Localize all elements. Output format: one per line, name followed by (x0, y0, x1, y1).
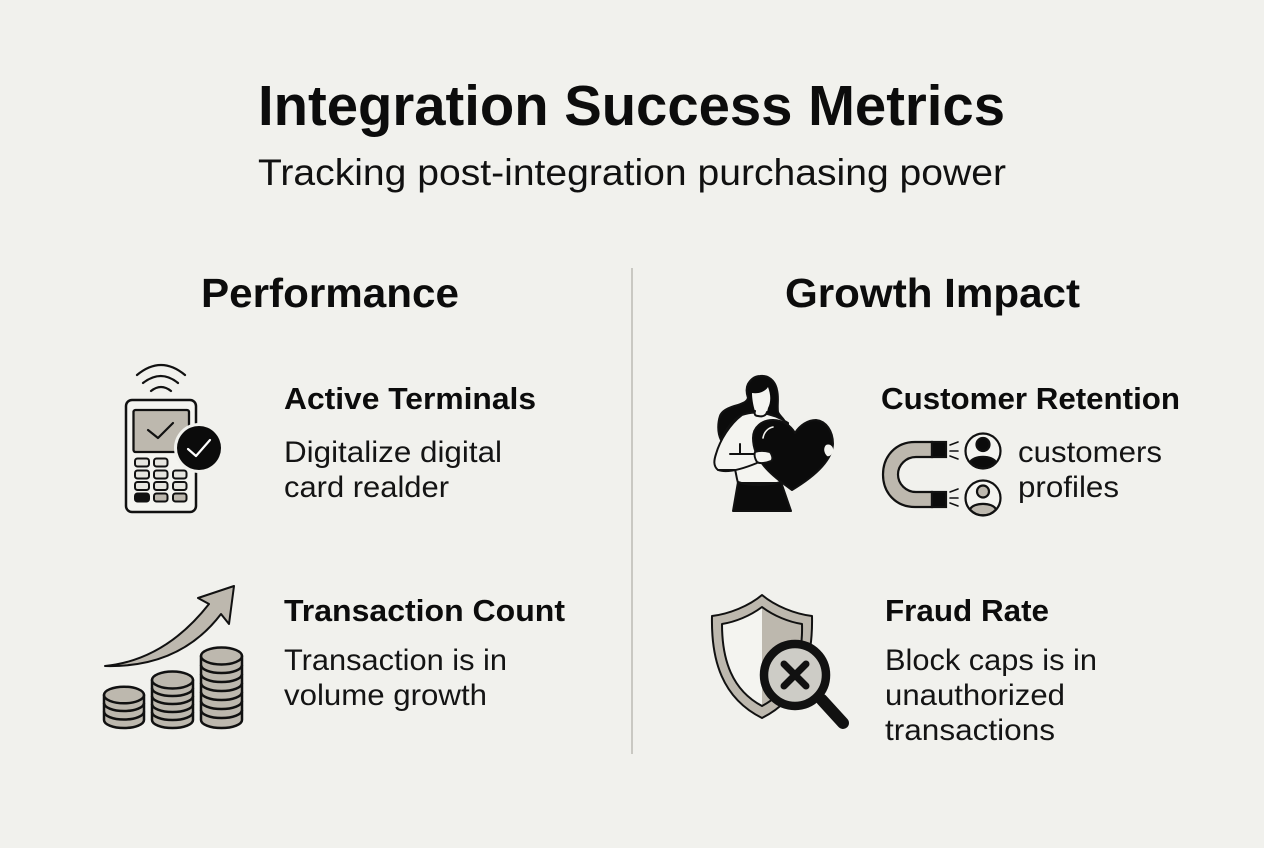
metric text: transaction count (284, 593, 565, 712)
metric text: active terminals (284, 381, 536, 504)
metric text: customer retention: customers (1018, 436, 1162, 469)
heading: growth impact: Growth Impact (785, 270, 1080, 316)
panel: performance (104, 270, 565, 728)
metric text: active terminals: Active Terminals (284, 381, 536, 416)
metric text: fraud rate (885, 593, 1097, 747)
metric text: fraud rate: transactions (885, 714, 1055, 747)
metric text: customer retention: profiles (1018, 471, 1119, 504)
icon: woman hugging heart (714, 376, 833, 511)
metric text: customer retention: Customer Retention (881, 381, 1180, 416)
icon: rising arrow over coin stacks (104, 586, 242, 728)
heading: performance: Performance (201, 270, 459, 316)
subtitle: Tracking post-integration purchasing power (258, 152, 1006, 193)
metric text: fraud rate: Fraud Rate (885, 593, 1049, 628)
panel: growth impact (712, 270, 1180, 747)
metric text: active terminals: Digitalize digital (284, 436, 502, 469)
icon: card terminal with check (126, 365, 224, 512)
icon: magnet attracting customer profiles (883, 434, 1000, 516)
metric text: transaction count: Transaction Count (284, 593, 565, 628)
metric text: fraud rate: unauthorized (885, 679, 1065, 712)
metric text: active terminals: card realder (284, 471, 449, 504)
title: Integration Success Metrics (258, 74, 1005, 138)
metric text: fraud rate: Block caps is in (885, 644, 1097, 677)
icon: shield with magnifier and cross (712, 595, 843, 723)
metric text: transaction count: Transaction is in (284, 644, 507, 677)
metric text: transaction count: volume growth (284, 679, 487, 712)
metric text: customer retention (881, 381, 1180, 504)
